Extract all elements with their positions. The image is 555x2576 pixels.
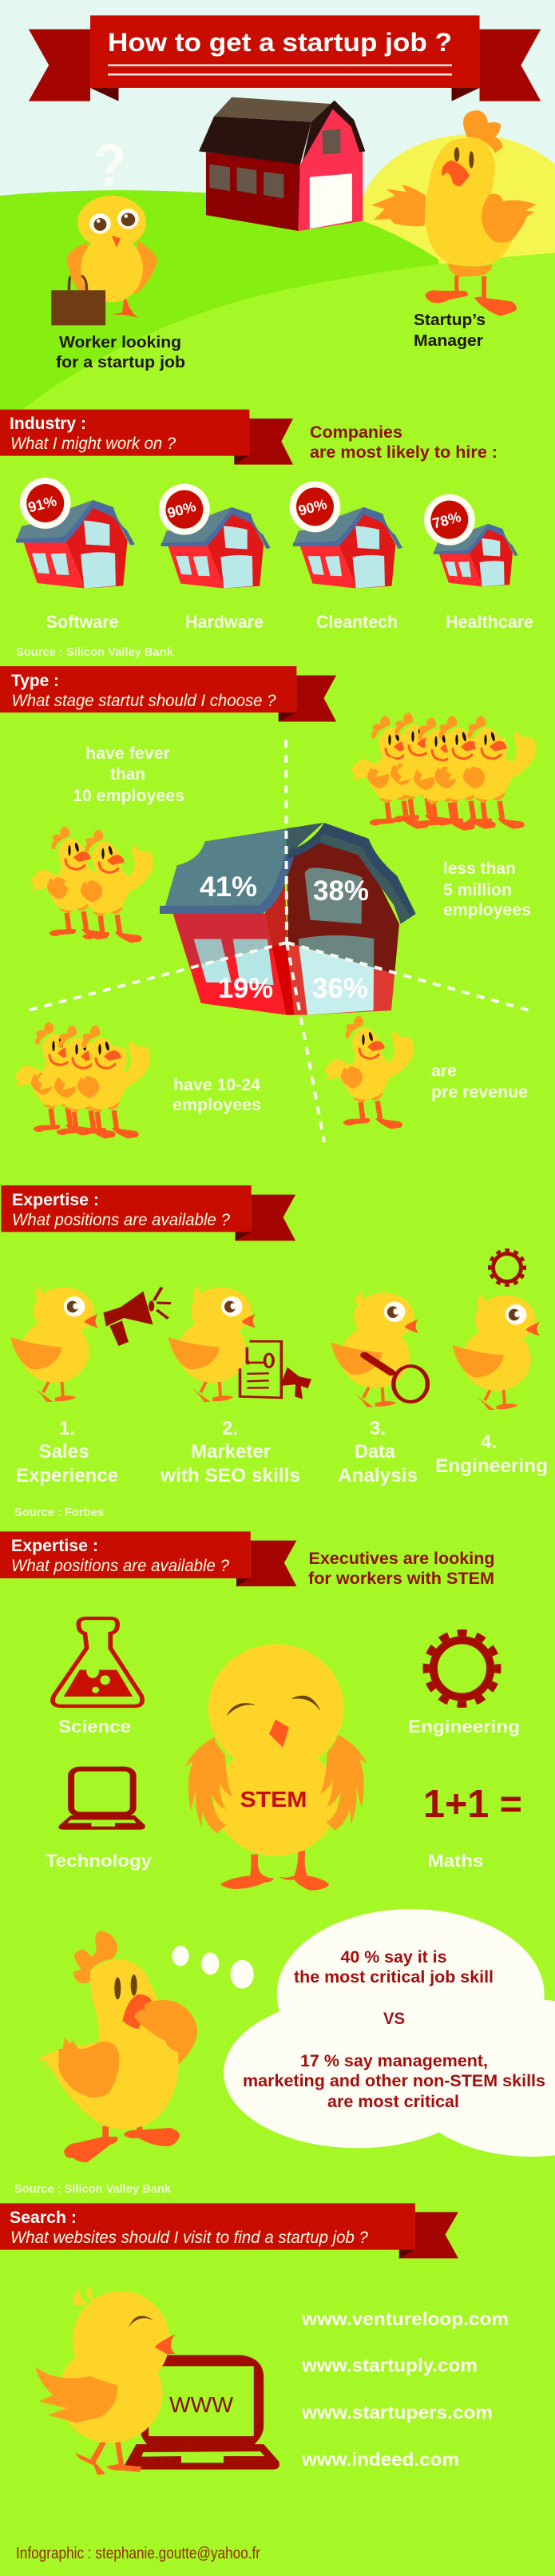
- house: cleantech 90%: [290, 481, 402, 589]
- section banner: search: [0, 2203, 458, 2258]
- label: worker: [56, 334, 185, 371]
- bubble text: the most critical job skill: [294, 1968, 494, 1987]
- label: fewer than 10 employees: than: [110, 765, 145, 784]
- house chart: [16, 478, 518, 589]
- chicken: one: [324, 1016, 414, 1129]
- barn split in quadrants: [160, 823, 416, 1015]
- bubble text: 40 % say it is: [340, 1948, 447, 1967]
- section banner: expertise: [1, 1185, 295, 1240]
- bubble text: are most critical: [327, 2093, 459, 2111]
- icon: laptop with WWW: WWW: [169, 2392, 234, 2417]
- title: How to get a startup job ?: [108, 28, 452, 57]
- label: technology: Technology: [46, 1851, 153, 1871]
- bubble text: [243, 1948, 545, 2111]
- label: pre revenue: are: [431, 1062, 457, 1080]
- section banner: type: Type :: [11, 672, 59, 690]
- icon: flask: [53, 1618, 142, 1706]
- section banner: expertise: What positions are available ?: [12, 1211, 230, 1229]
- panel: STEM: [0, 1531, 522, 1891]
- section banner: expertise: What positions are available ?: [11, 1557, 229, 1575]
- section banner: search: Search :: [10, 2209, 77, 2227]
- sky: [0, 0, 555, 272]
- label 2: with SEO skills: [160, 1465, 300, 1486]
- label: fewer than 10 employees: [73, 744, 184, 805]
- intro text: are most likely to hire :: [310, 443, 498, 462]
- chickens: two: [30, 827, 153, 943]
- label: less than 5 million: [443, 859, 531, 919]
- bubble text: 17 % say management,: [300, 2052, 488, 2070]
- percentages: 36%: [312, 973, 368, 1004]
- label 3: Analysis: [338, 1465, 418, 1486]
- label: worker: for a startup job: [56, 354, 185, 371]
- category labels: Cleantech: [316, 612, 398, 632]
- label 1: [16, 1418, 118, 1486]
- section banner: expertise: [0, 1531, 296, 1586]
- source: Source : Silicon Valley Bank: [14, 2183, 172, 2196]
- label 3: 3.: [370, 1418, 386, 1439]
- section banner: type: What stage startut should I choose ?: [11, 692, 276, 710]
- intro text: [308, 1550, 495, 1588]
- dashed dividers: [28, 740, 529, 1142]
- icon: small gear: [490, 1250, 525, 1285]
- icon: laptop with WWW: [122, 2355, 279, 2470]
- percentages: 38%: [313, 875, 369, 907]
- label: science: Science: [58, 1717, 131, 1737]
- chick 2 with SEO document: [168, 1285, 311, 1402]
- section banner: industry: [0, 410, 293, 465]
- section banner: type: [0, 666, 336, 721]
- thinking chicken: [38, 1931, 197, 2162]
- percentages: 41%: [200, 871, 257, 903]
- label 1: Experience: [16, 1465, 118, 1486]
- icon: laptop: [58, 1769, 145, 1830]
- section banner: industry: What I might work on ?: [10, 435, 176, 453]
- label: 10-24 employees: have 10-24: [173, 1076, 260, 1094]
- section banner: expertise: Expertise :: [12, 1191, 99, 1209]
- credit: Infographic : stephanie.goutte@yahoo.fr: [16, 2545, 260, 2562]
- chickens: five: [351, 712, 536, 831]
- search chick: [35, 2286, 175, 2475]
- intro text: Executives are looking: [308, 1550, 495, 1568]
- percent labels: 91%: [26, 493, 58, 516]
- label 1: 1.: [59, 1418, 75, 1439]
- label: fewer than 10 employees: 10 employees: [73, 787, 184, 805]
- house: healthcare 78%: [424, 494, 518, 586]
- percentages: [200, 871, 369, 1004]
- house: hardware 90%: [159, 484, 271, 589]
- category labels: Software: [46, 612, 119, 632]
- manager chicken: [371, 110, 537, 316]
- category labels: Hardware: [185, 612, 264, 632]
- percentages: 19%: [218, 973, 273, 1004]
- percent labels: 78%: [430, 509, 462, 532]
- source: Source : Silicon Valley Bank: [16, 646, 174, 659]
- category labels: [46, 612, 533, 632]
- intro text: Companies: [310, 423, 402, 442]
- intro text: [310, 423, 498, 462]
- big STEM chick: [185, 1644, 367, 1891]
- website list: www.ventureloop.com: [301, 2308, 509, 2329]
- sun: [357, 134, 555, 318]
- label: less than 5 million: employees: [443, 901, 531, 919]
- panel: type: [0, 666, 536, 1142]
- label: less than 5 million: 5 million: [443, 881, 512, 899]
- panel: thought bubble: [14, 1909, 555, 2196]
- barn: [199, 97, 365, 231]
- panel: search: [0, 2203, 509, 2562]
- label 3: [338, 1418, 418, 1486]
- label 3: Data: [355, 1441, 396, 1463]
- label 1: Sales: [38, 1441, 89, 1463]
- label 2: [160, 1418, 300, 1486]
- label: manager: [414, 312, 486, 350]
- chickens: three: [14, 1022, 150, 1138]
- website list: www.startuply.com: [301, 2355, 478, 2376]
- percent labels: 90%: [165, 498, 197, 522]
- worker chick with briefcase: [51, 196, 157, 325]
- intro text: for workers with STEM: [308, 1570, 494, 1588]
- chick 1 with megaphone: [10, 1285, 171, 1402]
- label 4: Engineering: [435, 1455, 548, 1477]
- website list: [301, 2308, 509, 2470]
- label 4: [435, 1431, 548, 1477]
- label 2: Marketer: [191, 1441, 271, 1463]
- section banner: expertise: Expertise :: [11, 1537, 98, 1555]
- label: pre revenue: pre revenue: [431, 1083, 528, 1101]
- bubble text: VS: [383, 2010, 405, 2028]
- chick 3 with magnifier: [331, 1291, 427, 1407]
- label: STEM: STEM: [240, 1787, 307, 1812]
- thought dots: [172, 1946, 254, 1989]
- label 4: 4.: [481, 1431, 497, 1453]
- bubble text: marketing and other non-STEM skills: [243, 2072, 545, 2090]
- question mark: ?: [93, 132, 126, 200]
- panel: hero scene: [0, 0, 555, 415]
- label: manager: Startup’s: [414, 312, 486, 329]
- house: software 91%: [16, 478, 135, 589]
- website list: www.startupers.com: [301, 2402, 493, 2423]
- label: fewer than 10 employees: have fever: [85, 744, 170, 763]
- panel: industry: [0, 410, 533, 659]
- chick 4 with gear: [452, 1293, 540, 1410]
- icon: gear: [426, 1633, 498, 1705]
- section banner: industry: Industry :: [10, 415, 86, 433]
- label: pre revenue: [431, 1062, 528, 1101]
- section banner: search: What websites should I visit to find a startup job ?: [10, 2229, 368, 2247]
- label 2: 2.: [222, 1418, 238, 1439]
- label: maths: Maths: [428, 1851, 484, 1871]
- website list: www.indeed.com: [301, 2449, 459, 2470]
- source: Source : Forbes: [14, 1506, 104, 1519]
- label: engineering: Engineering: [408, 1717, 520, 1737]
- icon: math formula: 1+1 =: [423, 1783, 522, 1826]
- label: manager: Manager: [414, 332, 483, 350]
- panel: expertise positions: [1, 1185, 548, 1519]
- label: 10-24 employees: employees: [172, 1096, 261, 1114]
- label: less than 5 million: less than: [443, 859, 516, 878]
- category labels: Healthcare: [446, 612, 533, 632]
- title banner: [29, 15, 541, 101]
- cloud: [224, 1909, 555, 2157]
- label: 10-24 employees: [172, 1076, 261, 1114]
- percent labels: [26, 493, 462, 532]
- hills: [0, 190, 555, 415]
- percent labels: 90%: [296, 496, 328, 519]
- label: worker: Worker looking: [59, 334, 181, 351]
